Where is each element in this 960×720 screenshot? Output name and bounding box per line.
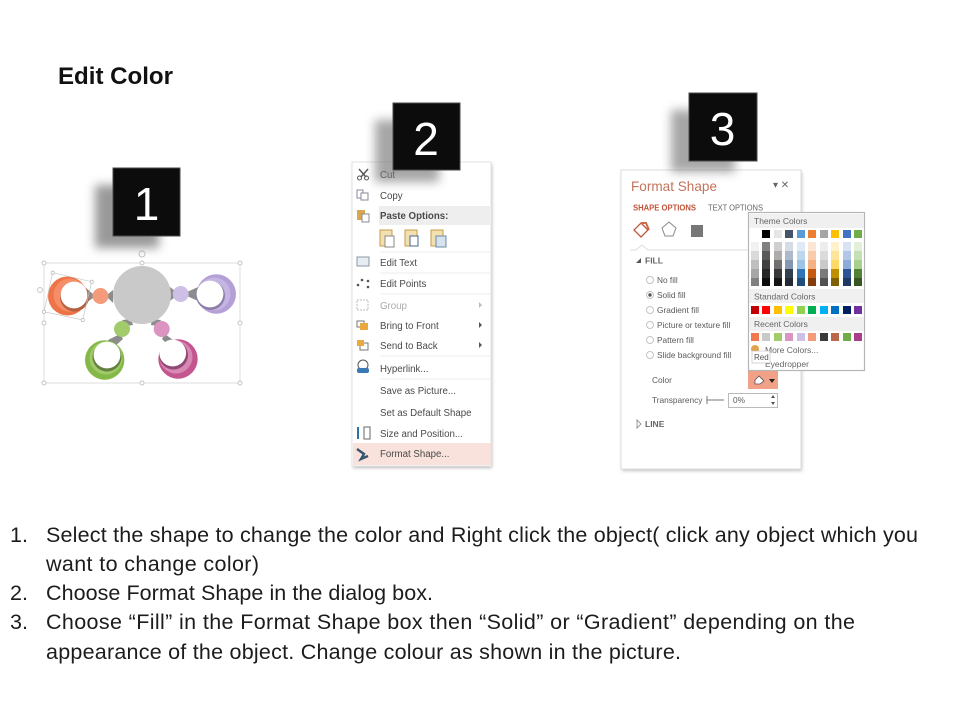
badge 2	[375, 103, 460, 182]
submenu arrows	[479, 302, 482, 348]
menu labels: Cut	[380, 170, 395, 181]
instructions list	[10, 523, 918, 664]
recent colors	[749, 317, 864, 341]
line section: LINE	[645, 419, 665, 429]
shade columns	[751, 242, 862, 286]
fill options	[646, 275, 731, 360]
line section	[637, 419, 665, 429]
more colors and eyedropper: More Colors...	[765, 345, 818, 355]
node: pink	[154, 321, 198, 379]
instructions list: want to change color)	[45, 552, 259, 576]
badge 1: 1	[134, 178, 159, 230]
instructions list: Choose Format Shape in the dialog box.	[46, 581, 433, 605]
instructions list: 3.	[10, 610, 28, 634]
menu separators	[380, 252, 490, 379]
standard colors: Standard Colors	[754, 292, 815, 302]
color control: Color	[652, 375, 672, 385]
menu labels: Set as Default Shape	[380, 408, 472, 419]
pane icons	[634, 222, 703, 237]
central circle	[113, 266, 171, 324]
fill options: Gradient fill	[657, 305, 699, 315]
menu labels: Size and Position...	[380, 429, 463, 440]
badge 1	[95, 168, 180, 248]
step 1: selected shape diagram	[38, 251, 242, 385]
title: Edit Color	[58, 63, 173, 90]
tabs: SHAPE OPTIONS	[633, 204, 697, 212]
instructions list: 1.	[10, 523, 28, 547]
recent colors: Recent Colors	[754, 319, 808, 329]
theme colors	[749, 214, 864, 286]
pane close controls: ▾ ✕	[773, 180, 789, 191]
pane title: Format Shape	[631, 178, 717, 194]
node: orange	[38, 271, 108, 322]
format shape highlight	[353, 443, 491, 465]
instructions list: Select the shape to change the color and Right click the object( click any object which you	[46, 523, 918, 547]
menu labels: Hyperlink...	[380, 364, 428, 375]
instructions list: appearance of the object. Change colour as shown in the picture.	[46, 640, 681, 664]
menu labels: Save as Picture...	[380, 386, 456, 397]
tooltip: red: Red	[754, 353, 769, 362]
transparency control: Transparency	[652, 395, 703, 405]
node: green	[85, 321, 130, 380]
more colors and eyedropper: Eyedropper	[765, 359, 809, 369]
standard colors	[749, 289, 864, 314]
menu labels: Edit Text	[380, 258, 417, 269]
fill options: No fill	[657, 275, 678, 285]
step 3: format shape pane	[621, 170, 802, 471]
color control	[652, 371, 778, 389]
node: purple	[173, 274, 236, 314]
paste options band	[379, 206, 490, 225]
fill options: Slide background fill	[657, 350, 731, 360]
instructions list: 2.	[10, 581, 28, 605]
tabs	[633, 204, 763, 212]
menu icons	[357, 169, 446, 459]
fill options: Picture or texture fill	[657, 320, 730, 330]
badge 3	[671, 93, 757, 172]
menu labels: Bring to Front	[380, 321, 439, 332]
menu labels: Paste Options:	[380, 211, 448, 222]
fill header	[636, 256, 663, 266]
menu labels	[380, 170, 472, 460]
step 2: context menu	[352, 162, 492, 468]
menu labels: Edit Points	[380, 279, 426, 290]
transparency control: 0%	[733, 395, 746, 405]
badge 2: 2	[413, 113, 439, 165]
section divider	[630, 245, 794, 250]
fill header: FILL	[645, 256, 663, 266]
tooltip: red	[752, 351, 770, 363]
tabs: TEXT OPTIONS	[708, 204, 763, 212]
fill options: Solid fill	[657, 290, 686, 300]
colour picker popup	[748, 212, 864, 370]
menu labels: Group	[380, 301, 407, 312]
badge 3: 3	[710, 103, 735, 155]
selection frame	[42, 251, 242, 385]
menu labels: Format Shape...	[380, 449, 449, 460]
transparency control	[652, 394, 778, 408]
menu labels: Send to Back	[380, 341, 438, 352]
connectors	[86, 287, 198, 348]
instructions list: Choose “Fill” in the Format Shape box then “Solid” or “Gradient” depending on the	[46, 610, 855, 634]
more colors and eyedropper	[751, 345, 818, 369]
fill options: Pattern fill	[657, 335, 694, 345]
menu labels: Copy	[380, 191, 403, 202]
theme colors: Theme Colors	[754, 216, 807, 226]
